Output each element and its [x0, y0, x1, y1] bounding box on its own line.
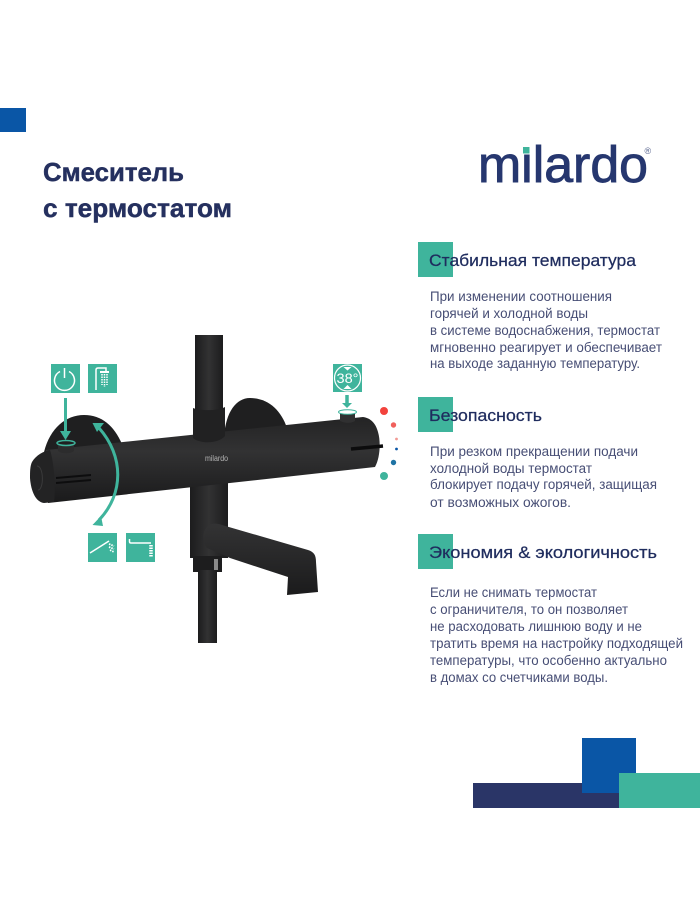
faucet — [30, 335, 383, 643]
logo: milardo: milardo — [478, 136, 648, 193]
panel: economy and ecology: с ограничителя, то он позволяет — [430, 602, 628, 617]
panel: economy and ecology: в домах со счетчиками воды. — [430, 670, 608, 685]
panel: safety: блокирует подачу горячей, защищая — [430, 477, 657, 492]
panel: stable temperature: мгновенно реагирует и обеспечивает — [430, 340, 662, 355]
panel: stable temperature: При изменении соотношения — [430, 289, 612, 304]
temperature dots — [380, 407, 398, 480]
icon: temperature 38: 38° — [336, 371, 358, 386]
panel: safety: При резком прекращении подачи — [430, 444, 638, 459]
panel: stable temperature: в системе водоснабжения, термостат — [430, 323, 660, 338]
panel: stable temperature: на выходе заданную температуру. — [430, 356, 640, 371]
upper pipe — [195, 335, 223, 411]
right slot — [351, 446, 383, 449]
decorative blocks bottom right — [473, 738, 700, 808]
lower collar — [193, 556, 222, 572]
arrow: to temperature knob — [338, 395, 356, 414]
pipe collar — [193, 407, 225, 442]
panel: safety: холодной воды термостат — [430, 461, 592, 476]
panel: economy and ecology: не расходовать лишнюю воду и не — [430, 619, 642, 634]
spout — [203, 524, 318, 595]
icon: rain shower — [88, 364, 117, 393]
panel: safety: Безопасность — [429, 406, 542, 425]
panel: safety: от возможных ожогов. — [430, 495, 571, 510]
panel: stable temperature — [418, 242, 662, 371]
left end cap — [30, 450, 55, 503]
title: с термостатом — [43, 193, 232, 223]
icon: hand shower — [88, 533, 117, 562]
main thermostat body — [46, 417, 380, 503]
curved arrow: diverter rotation — [92, 423, 118, 526]
panel: economy and ecology: Если не снимать термостат — [430, 585, 597, 600]
corner square — [0, 108, 26, 132]
logo: milardo: ® — [644, 146, 652, 156]
left knob — [58, 444, 74, 453]
panel: economy and ecology: тратить время на настройку подходящей — [430, 636, 683, 651]
icon: temperature 38 — [333, 364, 362, 392]
body label: milardo — [205, 454, 228, 463]
panel: stable temperature: Стабильная температура — [429, 251, 637, 270]
left slot — [56, 475, 91, 483]
lower pipe — [198, 570, 217, 643]
panel: stable temperature: горячей и холодной воды — [430, 306, 588, 321]
title — [43, 157, 232, 223]
icon: bath spout — [126, 533, 155, 562]
icon: power — [51, 364, 80, 393]
arrow: to power button — [57, 398, 75, 446]
right knob — [340, 412, 355, 423]
panel: economy and ecology: температуры, что особенно актуально — [430, 653, 667, 668]
wall discs — [44, 415, 122, 452]
title: Смеситель — [43, 157, 184, 187]
panel: economy and ecology — [418, 534, 683, 685]
panel: economy and ecology: Экономия & экологичность — [429, 543, 657, 562]
panel: safety — [418, 397, 657, 510]
lower body — [190, 478, 228, 558]
